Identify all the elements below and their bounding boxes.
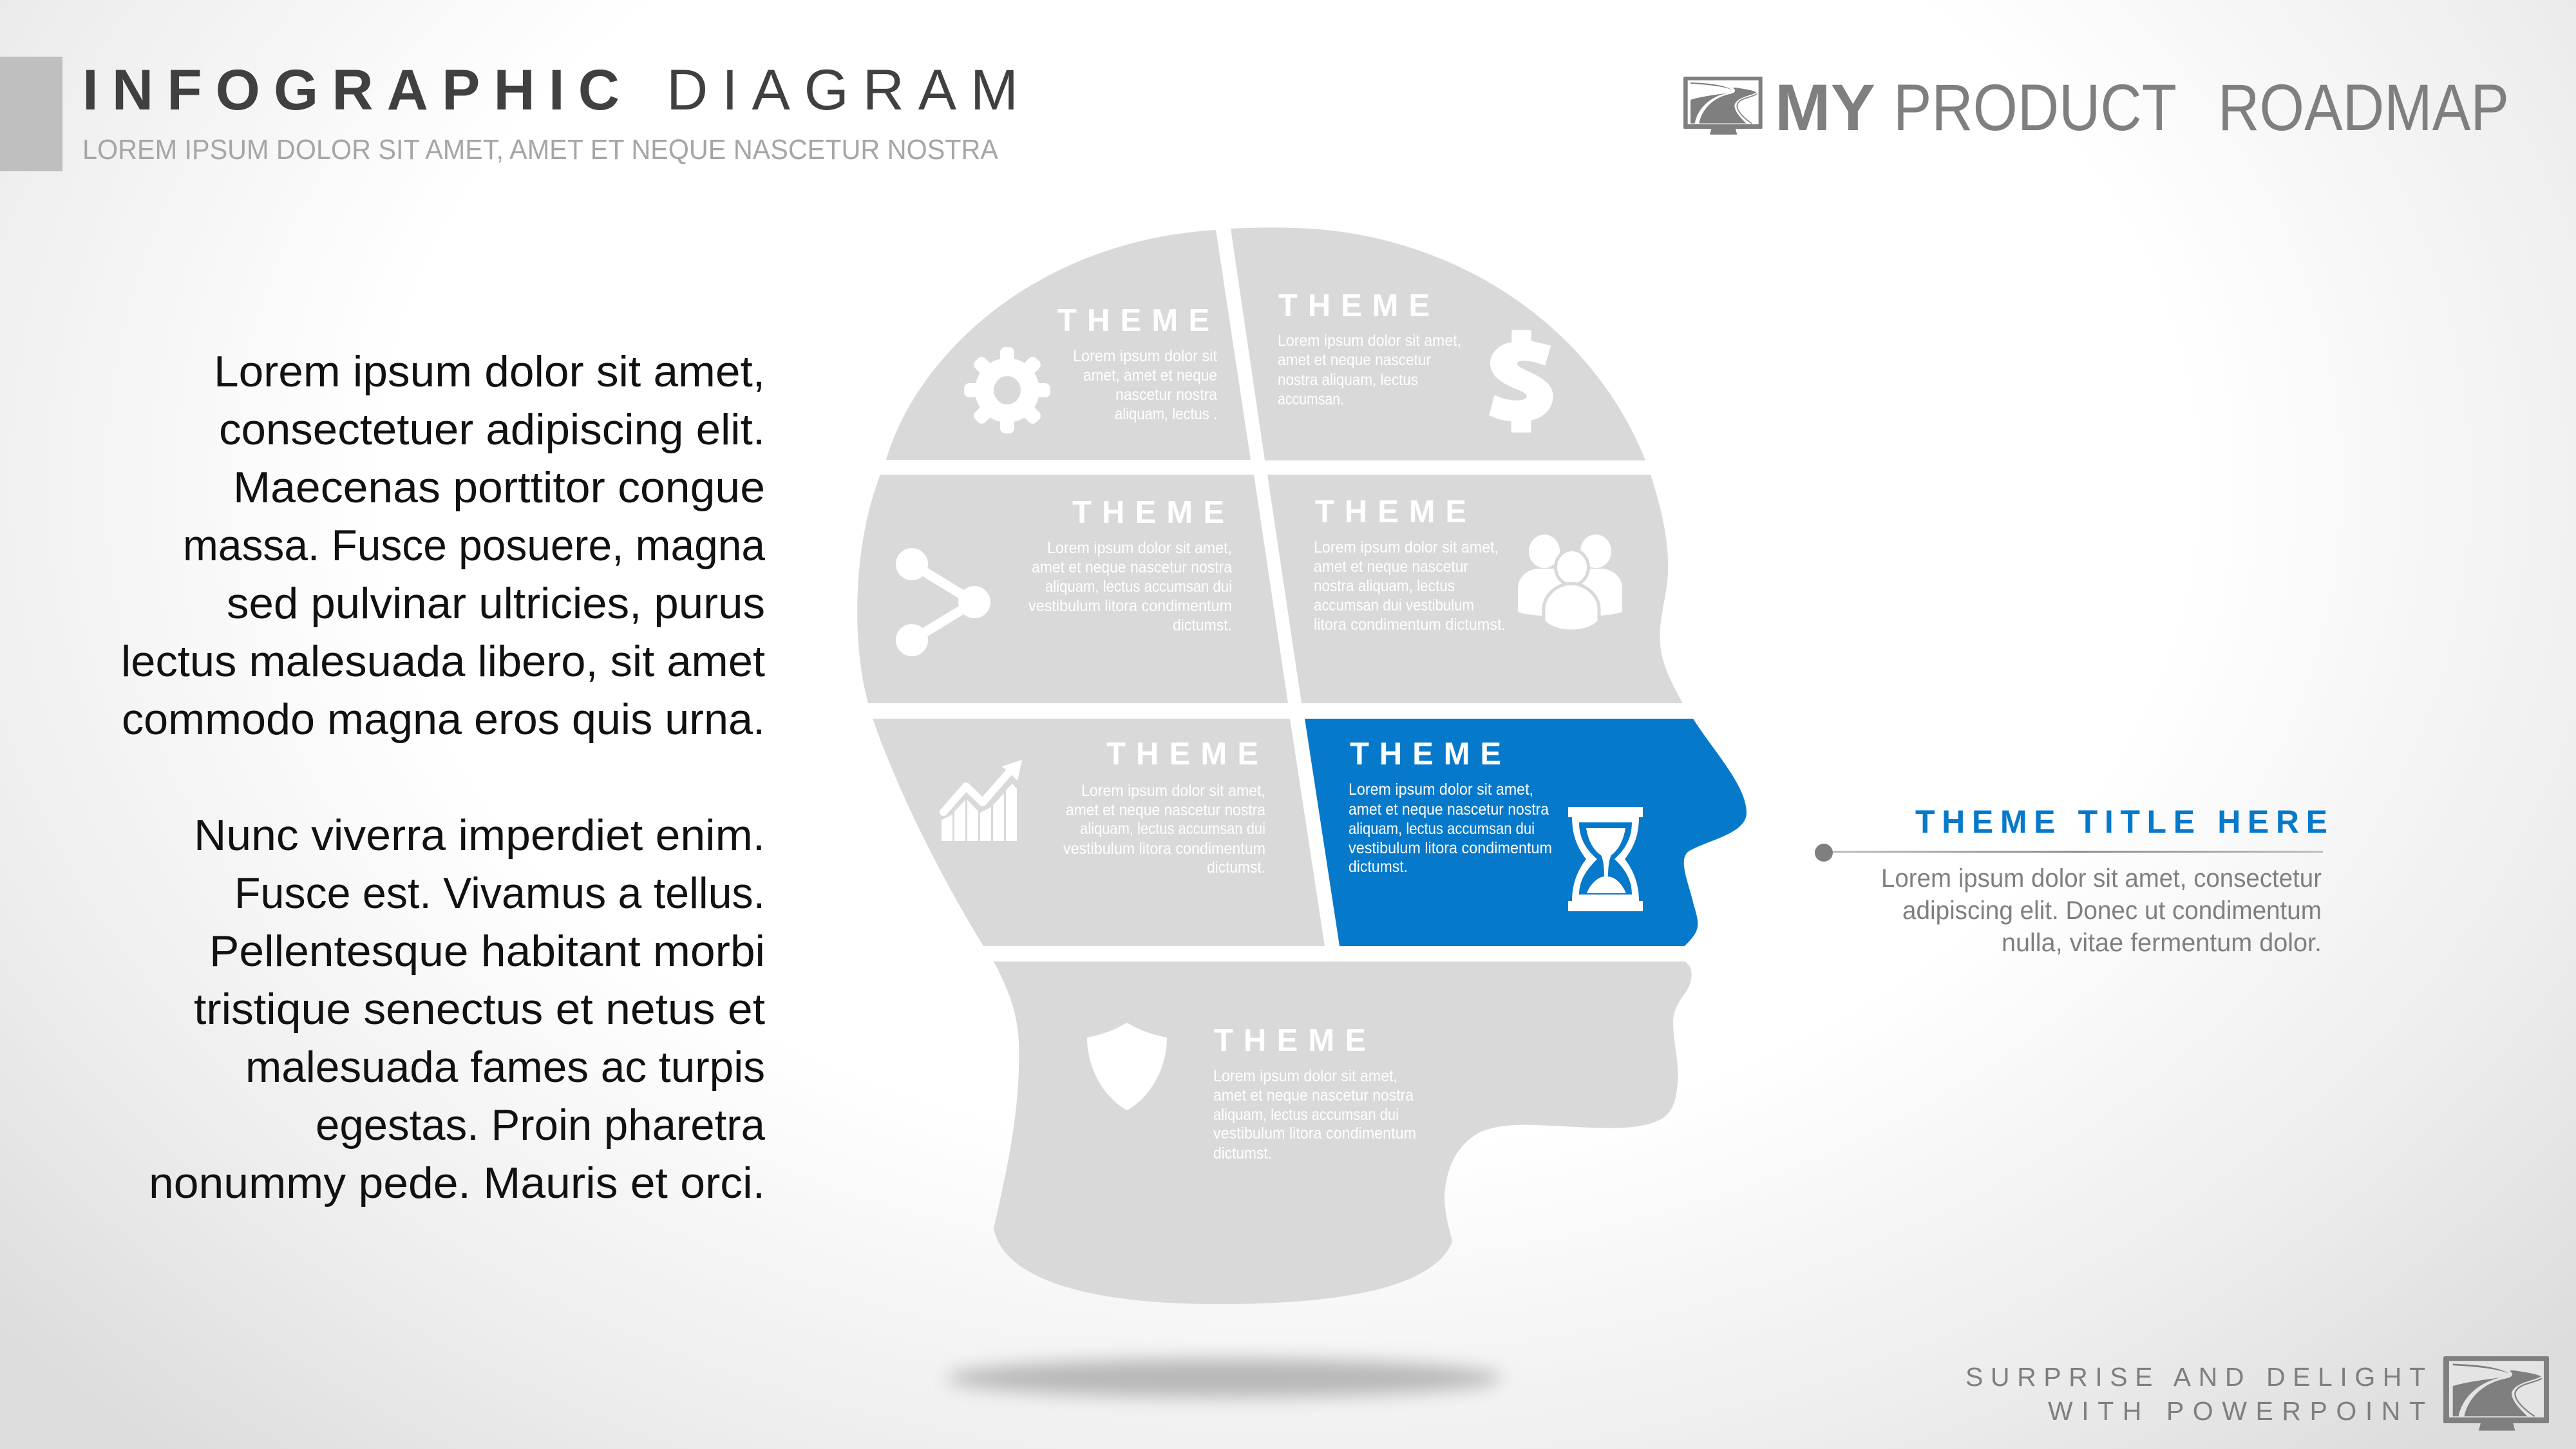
panel: security theme: [994, 961, 1692, 1304]
left body text: Lorem ipsum dolor sit amet,: [214, 347, 765, 396]
text: gear theme: nascetur nostra: [1115, 386, 1217, 404]
text: dollar theme: amet et neque nascetur: [1278, 351, 1431, 369]
text: growth theme: Lorem ipsum dolor sit amet,: [1081, 782, 1265, 800]
logo: top road monitor: [1683, 77, 1763, 135]
logo: bottom road monitor: [2443, 1356, 2549, 1431]
panel: gear theme: [886, 230, 1251, 460]
text: share theme: amet et neque nascetur nostra: [1032, 558, 1232, 576]
heading: time theme: THEME: [1350, 737, 1501, 772]
panel: share theme: [857, 475, 1288, 703]
left body text: lectus malesuada libero, sit amet: [121, 637, 765, 686]
heading: team theme: THEME: [1315, 495, 1466, 529]
title: [82, 57, 1018, 122]
text: share theme: aliquam, lectus accumsan dui: [1045, 578, 1232, 596]
text: gear theme: Lorem ipsum dolor sit: [1073, 347, 1217, 365]
text: time theme: vestibulum litora condimentum: [1349, 839, 1552, 857]
icon: shield: [1087, 1023, 1167, 1110]
left body text: [121, 347, 765, 1208]
text: team theme: [1314, 538, 1506, 634]
text: team theme: nostra aliquam, lectus: [1314, 577, 1455, 595]
title: INFOGRAPHIC: [82, 57, 620, 122]
head shadow: [946, 1359, 1502, 1397]
text: team theme: accumsan dui vestibulum: [1314, 596, 1474, 614]
text: team theme: amet et neque nascetur: [1314, 558, 1468, 576]
title: DIAGRAM: [667, 57, 1018, 122]
brand: my product roadmap: [1775, 71, 2509, 144]
text: gear theme: amet, amet et neque: [1083, 366, 1217, 384]
left body text: consectetuer adipiscing elit.: [219, 405, 765, 454]
heading: growth theme: THEME: [1106, 737, 1258, 772]
icon: people: [1518, 535, 1622, 631]
tagline: WITH POWERPOINT: [2048, 1396, 2425, 1426]
text: share theme: Lorem ipsum dolor sit amet,: [1047, 539, 1232, 557]
text: team theme: litora condimentum dictumst.: [1314, 616, 1506, 634]
callout leader line: [1815, 844, 2323, 862]
text: dollar theme: accumsan.: [1278, 390, 1344, 408]
brand: my product roadmap: PRODUCT: [1893, 71, 2177, 144]
text: share theme: dictumst.: [1173, 616, 1232, 634]
text: security theme: vestibulum litora condimentum: [1213, 1124, 1416, 1142]
text: team theme: Lorem ipsum dolor sit amet,: [1314, 538, 1499, 556]
panel: growth theme: [873, 719, 1325, 946]
text: time theme: dictumst.: [1349, 858, 1408, 876]
icon: hourglass: [1568, 807, 1643, 911]
left body text: commodo magna eros quis urna.: [122, 695, 765, 744]
left body text: tristique senectus et netus et: [194, 985, 765, 1034]
text: growth theme: dictumst.: [1207, 858, 1265, 876]
left body text: Nunc viverra imperdiet enim.: [194, 811, 765, 860]
left body text: malesuada fames ac turpis: [245, 1043, 765, 1092]
text: growth theme: [1063, 782, 1265, 876]
icon: growth chart: [942, 760, 1022, 841]
text: gear theme: [1073, 347, 1217, 423]
left body text: Fusce est. Vivamus a tellus.: [234, 869, 765, 918]
heading: share theme: THEME: [1072, 495, 1224, 530]
icon: gear: [964, 347, 1050, 433]
text: security theme: Lorem ipsum dolor sit amet,: [1213, 1067, 1397, 1085]
text: growth theme: amet et neque nascetur nostra: [1066, 801, 1265, 819]
text: dollar theme: [1278, 332, 1461, 408]
left body text: sed pulvinar ultricies, purus: [227, 579, 765, 628]
callout text: adipiscing elit. Donec ut condimentum: [1902, 896, 2322, 925]
text: time theme: amet et neque nascetur nostra: [1349, 800, 1549, 819]
callout: theme title: [1815, 804, 2327, 957]
text: share theme: [1028, 539, 1232, 634]
text: growth theme: aliquam, lectus accumsan dui: [1080, 820, 1265, 838]
text: security theme: amet et neque nascetur nostra: [1213, 1086, 1414, 1104]
callout heading: THEME TITLE HERE: [1915, 804, 2327, 840]
subtitle: LOREM IPSUM DOLOR SIT AMET, AMET ET NEQUE NASCETUR NOSTRA: [82, 134, 999, 166]
text: growth theme: vestibulum litora condimentum: [1063, 840, 1265, 858]
text: dollar theme: nostra aliquam, lectus: [1278, 371, 1418, 389]
left body text: Maecenas porttitor congue: [233, 463, 765, 512]
heading: dollar theme: THEME: [1278, 289, 1430, 323]
text: share theme: vestibulum litora condimentum: [1028, 597, 1232, 615]
heading: security theme: THEME: [1214, 1023, 1366, 1058]
panel: team theme: [1267, 475, 1683, 703]
left body text: nonummy pede. Mauris et orci.: [149, 1159, 765, 1208]
text: security theme: aliquam, lectus accumsan dui: [1213, 1106, 1399, 1124]
heading: gear theme: THEME: [1057, 303, 1209, 338]
text: time theme: aliquam, lectus accumsan dui: [1349, 820, 1535, 838]
text: gear theme: aliquam, lectus .: [1115, 405, 1217, 423]
text: security theme: [1213, 1067, 1416, 1162]
brand: my product roadmap: MY: [1775, 71, 1875, 144]
icon: dollar sign: [1489, 330, 1553, 433]
icon: share: [896, 548, 990, 656]
text: time theme: Lorem ipsum dolor sit amet,: [1349, 781, 1533, 799]
text: time theme: [1349, 781, 1552, 876]
callout text: Lorem ipsum dolor sit amet, consectetur: [1881, 864, 2322, 893]
brand: my product roadmap: ROADMAP: [2218, 71, 2509, 144]
title accent bar: [0, 57, 62, 171]
panel: time theme (highlighted): [1305, 719, 1747, 946]
panel: dollar theme: [1231, 227, 1645, 460]
left body text: massa. Fusce posuere, magna: [183, 521, 765, 570]
tagline: SURPRISE AND DELIGHT: [1965, 1362, 2425, 1392]
tagline: [1965, 1362, 2425, 1426]
left body text: Pellentesque habitant morbi: [209, 927, 765, 976]
callout text: [1881, 864, 2322, 957]
callout text: nulla, vitae fermentum dolor.: [2002, 929, 2322, 957]
text: dollar theme: Lorem ipsum dolor sit amet,: [1278, 332, 1461, 350]
text: security theme: dictumst.: [1213, 1144, 1272, 1162]
left body text: egestas. Proin pharetra: [316, 1101, 765, 1150]
